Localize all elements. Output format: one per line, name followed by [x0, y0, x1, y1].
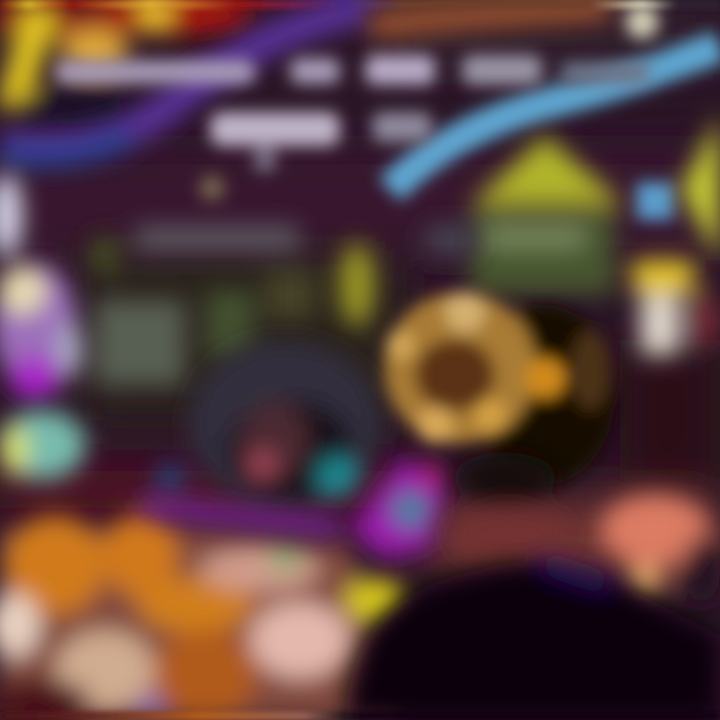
orange top banner — [370, 6, 610, 26]
yellow-green tent at right edge — [680, 115, 720, 260]
lantern stall right — [632, 260, 720, 355]
top-left festive decorations — [0, 0, 255, 124]
purple table band — [140, 460, 450, 560]
foreground dark figure — [345, 562, 720, 720]
peach counter right — [600, 494, 720, 604]
background wash — [0, 20, 720, 580]
pastries bottom-left — [0, 513, 405, 720]
soft bottom edge colour — [0, 712, 720, 720]
person head silhouette — [450, 452, 570, 561]
soft top edge colour — [0, 0, 720, 9]
waffle pretzel snack — [384, 292, 615, 485]
blue ribbon — [390, 46, 720, 220]
left teal lantern — [0, 410, 86, 480]
white lantern — [625, 5, 659, 39]
purple ribbon — [0, 6, 370, 156]
green tent right of centre — [470, 135, 625, 295]
blurred headline — [55, 55, 650, 201]
chalkboard menus — [89, 225, 475, 385]
left lantern purple and white — [0, 173, 84, 400]
hooded figure — [156, 340, 381, 510]
